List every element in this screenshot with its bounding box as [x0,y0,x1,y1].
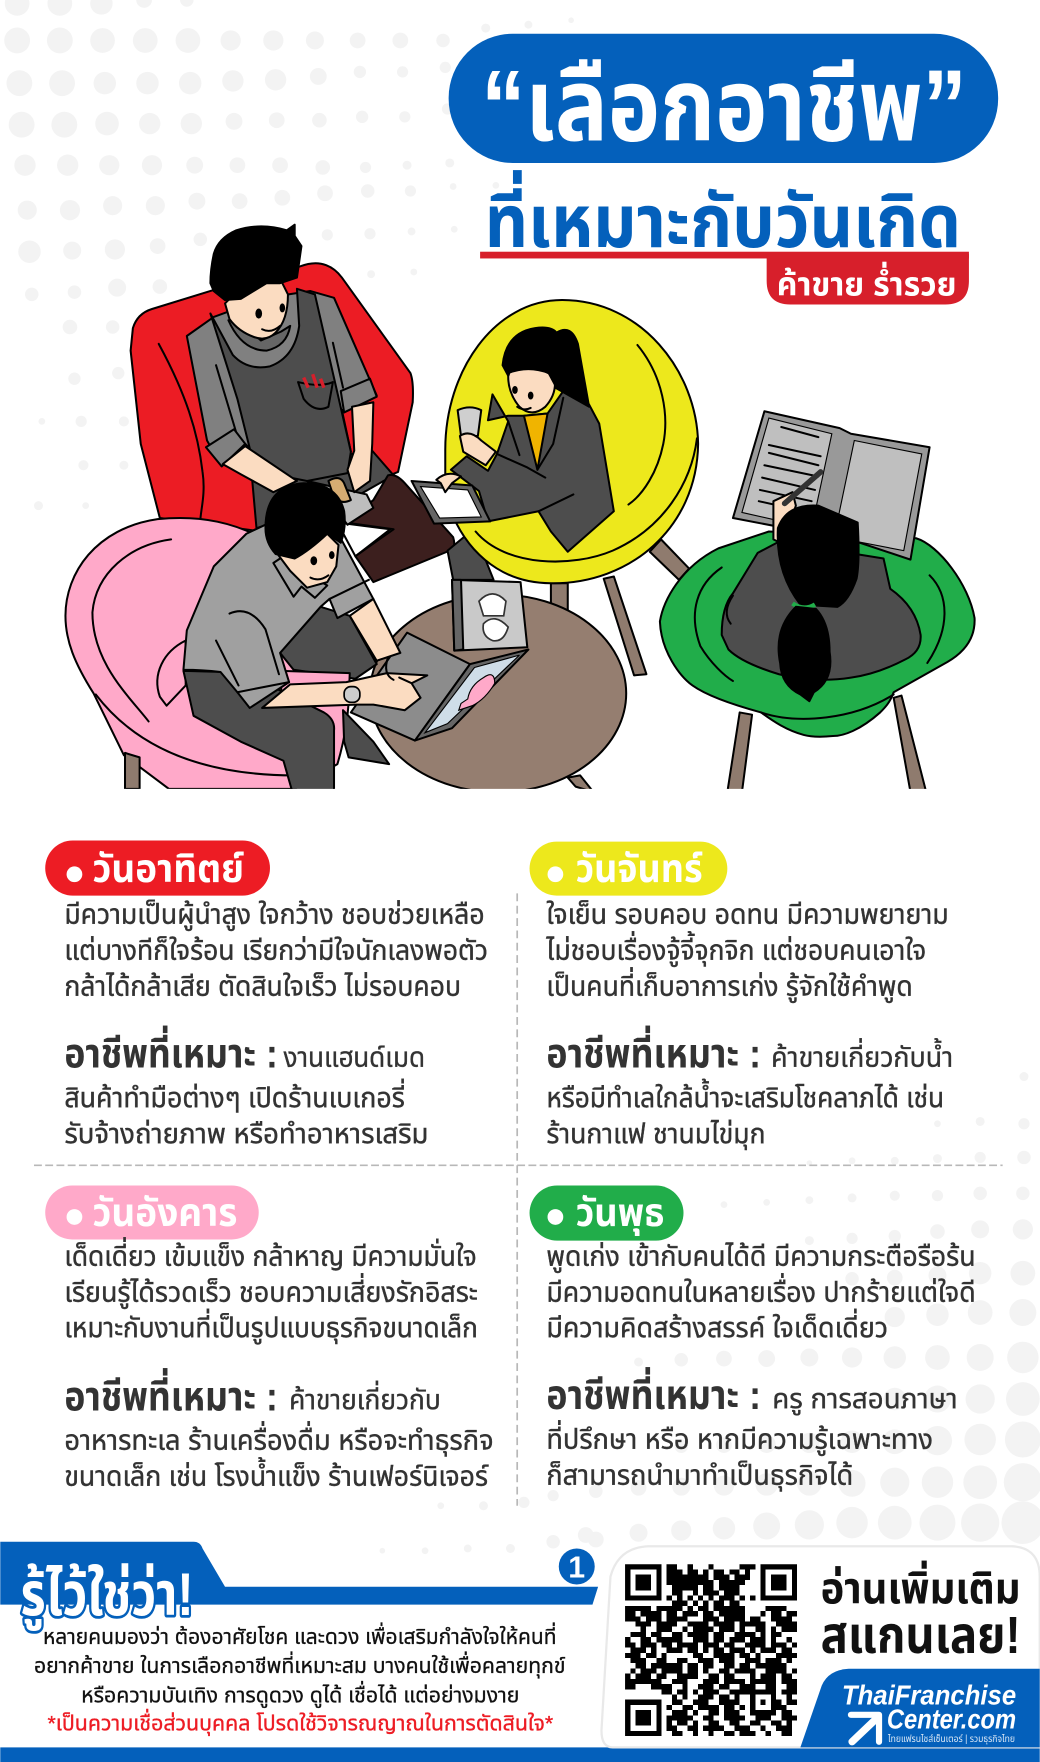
illustration: round table [370,594,626,792]
text: อ่านเพิ่มเติม สแกนเลย!: อ่านเพิ่มเติม [821,1560,1021,1614]
panel: Monday [530,842,953,1150]
text: Wednesday careers: ที่ปรึกษา หรือ หากมีความรู้เฉพาะทาง [546,1419,933,1456]
pill: วันพุธ: วันพุธ [576,1191,664,1236]
panel: QR card [601,1546,1040,1747]
text: Monday personality: เป็นคนที่เก็บอาการเก่ง รู้จักใช้คำพูด [546,967,913,1004]
illustration: green chair legs [727,696,926,792]
text: Wednesday careers [546,1367,958,1491]
illustration: people working in coloured chairs [65,225,975,792]
illustration: person reading from behind [722,472,921,701]
icon: arrow [851,1715,879,1742]
divider: vertical dashed line [516,893,518,1506]
illustration: open book [733,411,930,560]
text: did you know note: หลายคนมองว่า ต้องอาศัยโชค และดวง เพื่อเสริมกำลังใจให้คนที่ [43,1622,557,1649]
pill: วันอาทิตย์: วันอาทิตย์ [92,847,244,891]
pill: วันจันทร์: วันจันทร์ [576,847,703,891]
text: Wednesday personality [546,1240,976,1343]
illustration: pink chair [65,518,349,789]
text: Wednesday personality: มีความคิดสร้างสรรค์ ใจเด็ดเดี่ยว [546,1308,888,1343]
illustration: red chair [131,263,413,530]
illustration: green chair [660,532,975,737]
QR code [625,1564,797,1736]
footer bar [0,1747,1040,1762]
illustration: menu book on table [452,580,527,651]
pill: วันพุธ [530,1186,684,1241]
text: Sunday personality: แต่บางทีก็ใจร้อน เรียกว่ามีใจนักเลงพอตัว [64,935,488,966]
text: Wednesday careers: อาชีพที่เหมาะ : [546,1367,761,1418]
text: Monday personality: ไม่ชอบเรื่องจู้จี้จุกจิก แต่ชอบคนเอาใจ [545,931,926,968]
page number badge: 1 [568,1552,585,1585]
panel: Wednesday [530,1186,976,1491]
illustration: woman with tablet [412,328,614,552]
text: Monday careers: ค้าขายเกี่ยวกับน้ำ [771,1037,953,1072]
text: Monday careers [546,1025,953,1150]
text: Monday personality: ใจเย็น รอบคอบ อดทน มีความพยายาม [546,899,949,930]
text: Tuesday personality: เด็ดเดี่ยว เข้มแข็ง กล้าหาญ มีความมั่นใจ [64,1236,477,1271]
text: Monday careers: อาชีพที่เหมาะ : [546,1025,761,1077]
heading: รู้ไว้ใช่ว่า!: รู้ไว้ใช่ว่า! [21,1560,194,1631]
text: Wednesday careers: ก็สามารถนำมาทำเป็นธุรกิจได้ [546,1459,853,1491]
text: Wednesday personality: มีความอดทนในหลายเรื่อง ปากร้ายแต่ใจดี [546,1272,976,1307]
background halftone dots top left [4,0,574,510]
text: Tuesday careers: ขนาดเล็ก เช่น โรงน้ำแข็ง ร้านเฟอร์นิเจอร์ [64,1457,489,1492]
text: Tuesday careers: อาหารทะเล ร้านเครื่องดื่ม หรือจะทำธุรกิจ [64,1421,494,1457]
text: Sunday personality: มีความเป็นผู้นำสูง ใจกว้าง ชอบช่วยเหลือ [64,899,485,932]
logo: ThaiFranchise Center.com: Center.com [887,1703,1016,1734]
text: Monday careers: ร้านกาแฟ ชานมไข่มุก [546,1118,766,1150]
logo: ThaiFranchise Center.com: ThaiFranchise [842,1680,1016,1711]
logo: ThaiFranchise Center.com: ไทยแฟรนไชส์เซ็นเตอร์ | รวมธุรกิจไทย [887,1732,1015,1745]
divider: horizontal dashed line [34,1164,1003,1166]
text: did you know note: *เป็นความเชื่อส่วนบุคคล โปรดใช้วิจารณญาณในการตัดสินใจ* [47,1709,553,1737]
text: Sunday careers: อาชีพที่เหมาะ : [64,1025,278,1077]
illustration: back leg behind table [343,710,389,764]
text: Sunday careers: รับจ้างถ่ายภาพ หรือทำอาหารเสริม [64,1118,428,1149]
text: Tuesday personality: เหมาะกับงานที่เป็นรูปแบบธุรกิจขนาดเล็ก [64,1308,478,1345]
text: did you know note [34,1622,566,1737]
illustration: man in apron [187,225,494,582]
text: Tuesday careers [64,1368,494,1492]
pill: วันจันทร์ [530,842,727,896]
illustration: laptop [351,633,528,741]
pill: วันอาทิตย์ [45,841,270,896]
text: Sunday personality: กล้าได้กล้าเสีย ตัดสินใจเร็ว ไม่รอบคอบ [64,971,461,1002]
text: Tuesday careers: ค้าขายเกี่ยวกับ [289,1380,441,1415]
text: Monday careers: หรือมีทำเลใกล้น้ำจะเสริมโชคลาภได้ เช่น [546,1078,944,1113]
pill: วันอังคาร [45,1186,259,1239]
illustration: yellow chair [445,300,698,583]
text: Tuesday personality: เรียนรู้ได้รวดเร็ว ชอบความเสี่ยงรักอิสระ [64,1272,478,1309]
illustration: man with laptop [183,483,427,792]
text: Sunday careers: สินค้าทำมือต่างๆ เปิดร้านเบเกอรี่ [64,1078,405,1113]
text: did you know note: อยากค้าขาย ในการเลือกอาชีพที่เหมาะสม บางคนใช้เพื่อคลายทุกข์ [34,1651,566,1679]
text: Sunday careers: งานแฮนด์เมด [283,1041,425,1072]
text: Tuesday careers: อาชีพที่เหมาะ : [64,1368,278,1419]
text: อ่านเพิ่มเติม สแกนเลย! [821,1560,1021,1664]
text: Monday personality [545,899,949,1004]
red tag: ค้าขาย ร่ำรวย [767,254,969,305]
illustration: yellow chair legs [551,539,689,675]
panel: Sunday [45,841,488,1149]
background halftone dots right side [380,1072,1040,1554]
title pill: เลือกอาชีพ: “เลือกอาชีพ” [481,49,967,162]
banner: blue tab behind รู้ไว้ใช่ว่า [0,1542,598,1605]
panel: Tuesday [45,1186,494,1492]
text: Tuesday personality [64,1236,478,1345]
pill: วันอังคาร: วันอังคาร [92,1191,237,1235]
red tag: ค้าขาย ร่ำรวย: ค้าขาย ร่ำรวย [777,262,957,303]
subtitle: ที่เหมาะกับวันเกิด: ที่เหมาะกับวันเกิด [485,170,961,263]
text: Sunday personality [64,899,488,1002]
text: Sunday careers [64,1025,428,1149]
page number badge [559,1548,595,1585]
text: Wednesday personality: พูดเก่ง เข้ากับคนได้ดี มีความกระตือรือร้น [546,1240,976,1273]
logo: ThaiFranchise Center.com [800,1669,1040,1747]
text: did you know note: หรือความบันเทิง การดูดวง ดูได้ เชื่อได้ แต่อย่างมงาย [81,1680,519,1708]
text: Wednesday careers: ครู การสอนภาษา [772,1383,958,1416]
